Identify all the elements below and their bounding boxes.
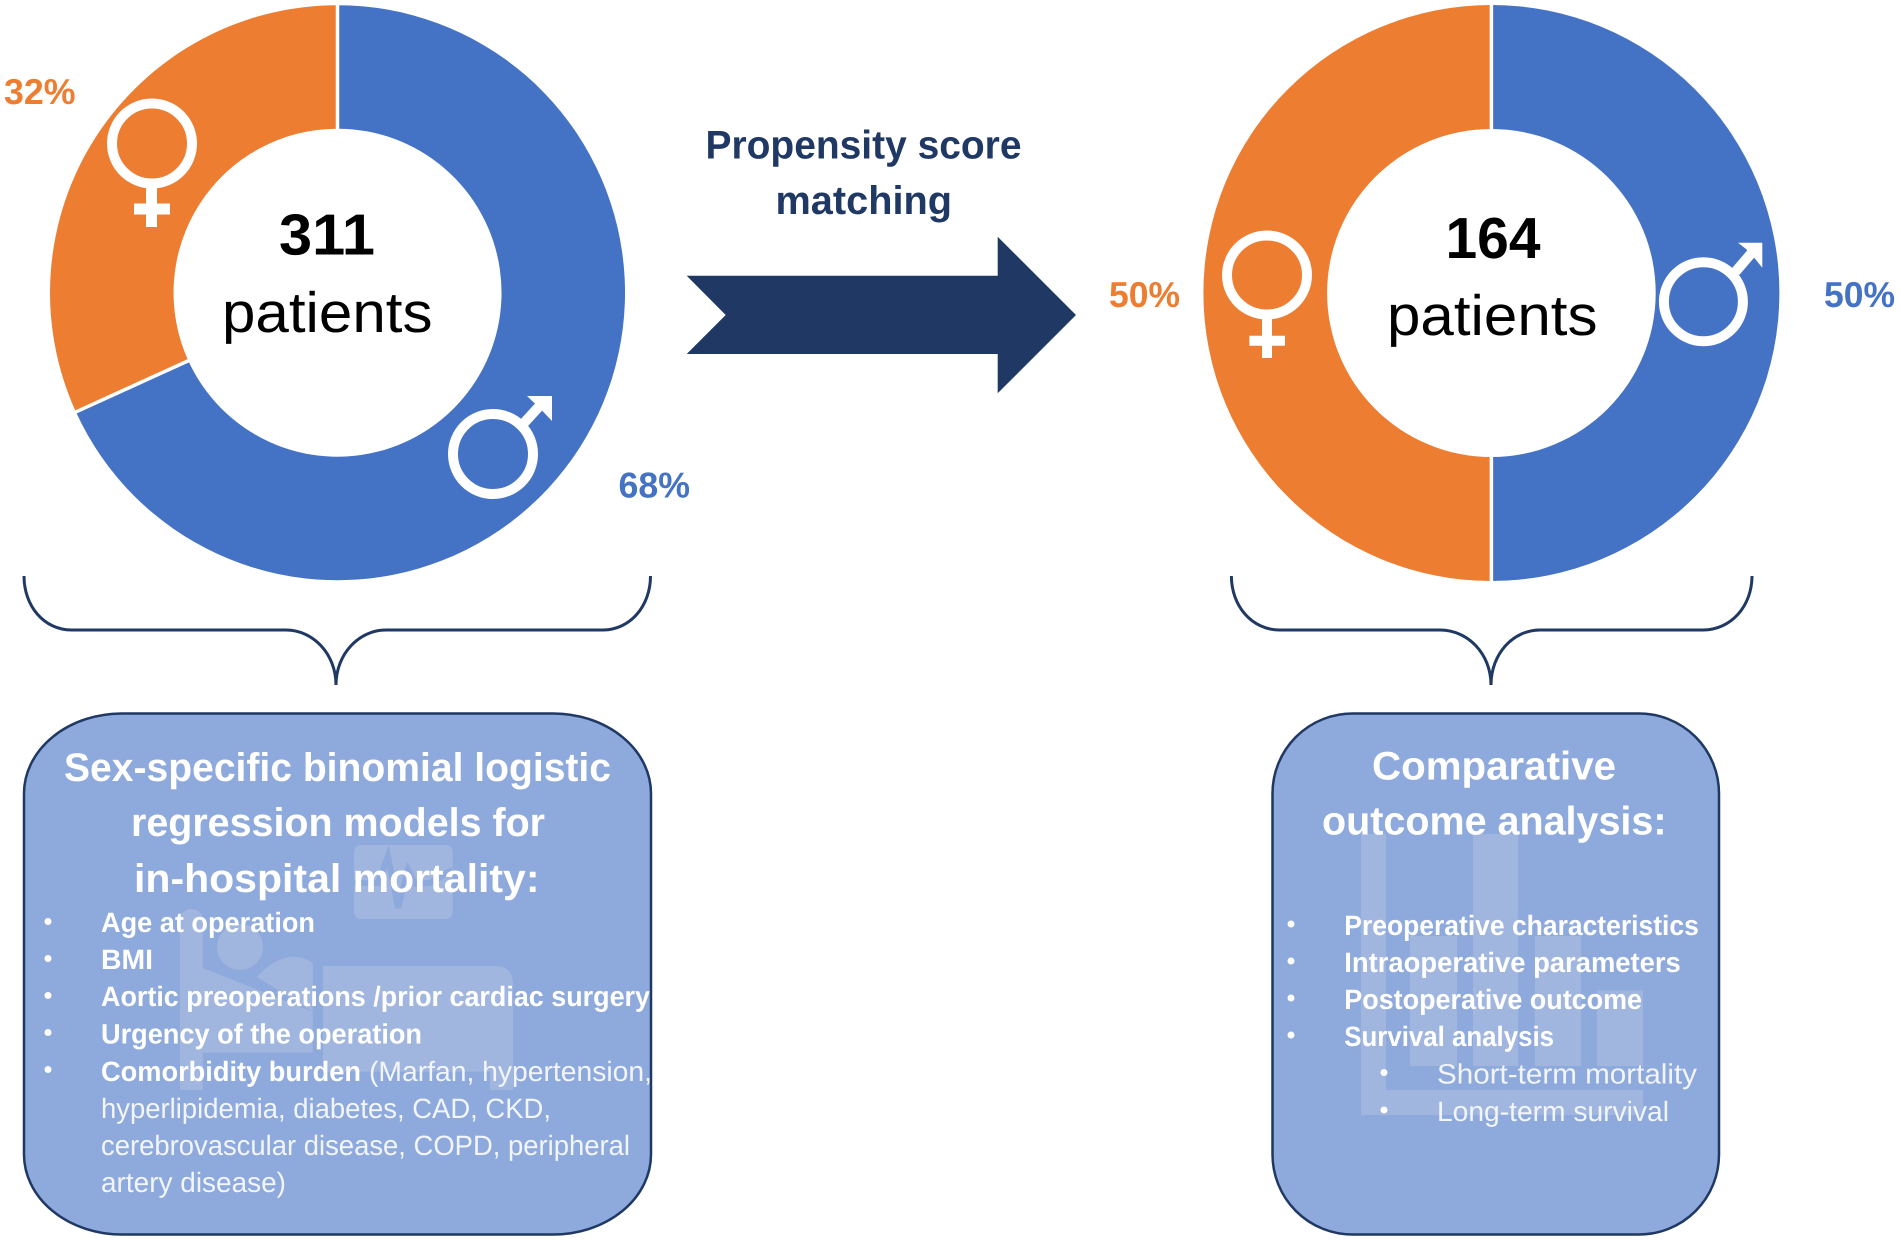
center label: 311 patients [222,202,432,345]
panel title: Comparative [1372,744,1616,788]
icon: female symbol [1227,236,1307,358]
icon: male symbol [1664,243,1762,341]
list: model covariates: Comorbidity burden [101,1056,361,1087]
center label: 311 patients: 311 [279,202,375,268]
segment: female 50% [1203,5,1491,581]
list: outcome analyses: Postoperative outcome [1344,984,1642,1015]
panel title: Sex-specific binomial logistic [64,746,611,790]
list: outcome analyses: Survival analysis [1344,1021,1554,1052]
icon: hospital bed watermark [180,845,513,1090]
list: model covariates: Age at operation [101,907,315,938]
brace: right [1231,576,1752,685]
icon: female symbol [112,104,192,227]
segment: male 68% [76,5,625,580]
label: female 50%: 50% [1109,274,1180,315]
brace: left [24,576,650,685]
center label: 164 patients: 164 [1446,206,1540,271]
panel title: regression models for [131,801,545,845]
panel: comparative outcome analysis [1272,714,1719,1234]
label: female 32%: 32% [4,71,76,112]
list: model covariates [101,907,652,1198]
list: model covariates: Aortic preoperations /prior cardiac surgery [101,981,650,1012]
heading: propensity score matching [706,123,1022,223]
list: outcome analyses [1344,910,1699,1127]
icon: bar chart watermark [1361,834,1643,1115]
donut chart: 164 patients [1109,4,1895,582]
list: outcome analyses: Intraoperative parameters [1344,947,1681,978]
panel title [64,746,611,901]
bullet markers [44,918,52,1073]
label: male 50%: 50% [1824,274,1895,315]
bullet markers [1288,920,1388,1114]
list: model covariates: (Marfan, hypertension, [369,1056,652,1087]
heading: propensity score matching: Propensity score [706,123,1022,167]
list: model covariates: hyperlipidemia, diabetes, CAD, CKD, [101,1093,551,1124]
center label: 164 patients: patients [1387,284,1598,348]
center label: 164 patients [1387,206,1598,348]
label: male 68%: 68% [618,464,690,506]
center label: 311 patients: patients [222,281,432,345]
segment: female 32% [50,5,337,412]
panel: sex-specific regression models [24,714,652,1234]
icon: male symbol [453,396,552,494]
list: outcome analyses: Short-term mortality [1437,1059,1697,1090]
list: outcome analyses: Preoperative characteristics [1344,910,1699,941]
list: model covariates: artery disease) [101,1167,286,1198]
list: model covariates: BMI [101,944,153,975]
segment: male 50% [1491,5,1779,581]
panel title: outcome analysis: [1322,800,1666,844]
arrow: notched right arrow [687,237,1076,393]
heading: propensity score matching: matching [776,179,952,223]
panel title [1322,744,1666,844]
donut chart: 311 patients [4,4,690,580]
list: outcome analyses: Long-term survival [1437,1096,1669,1127]
list: model covariates: Urgency of the operation [101,1018,422,1050]
list: model covariates: cerebrovascular disease, COPD, peripheral [101,1130,630,1161]
panel title: in-hospital mortality: [134,857,540,901]
